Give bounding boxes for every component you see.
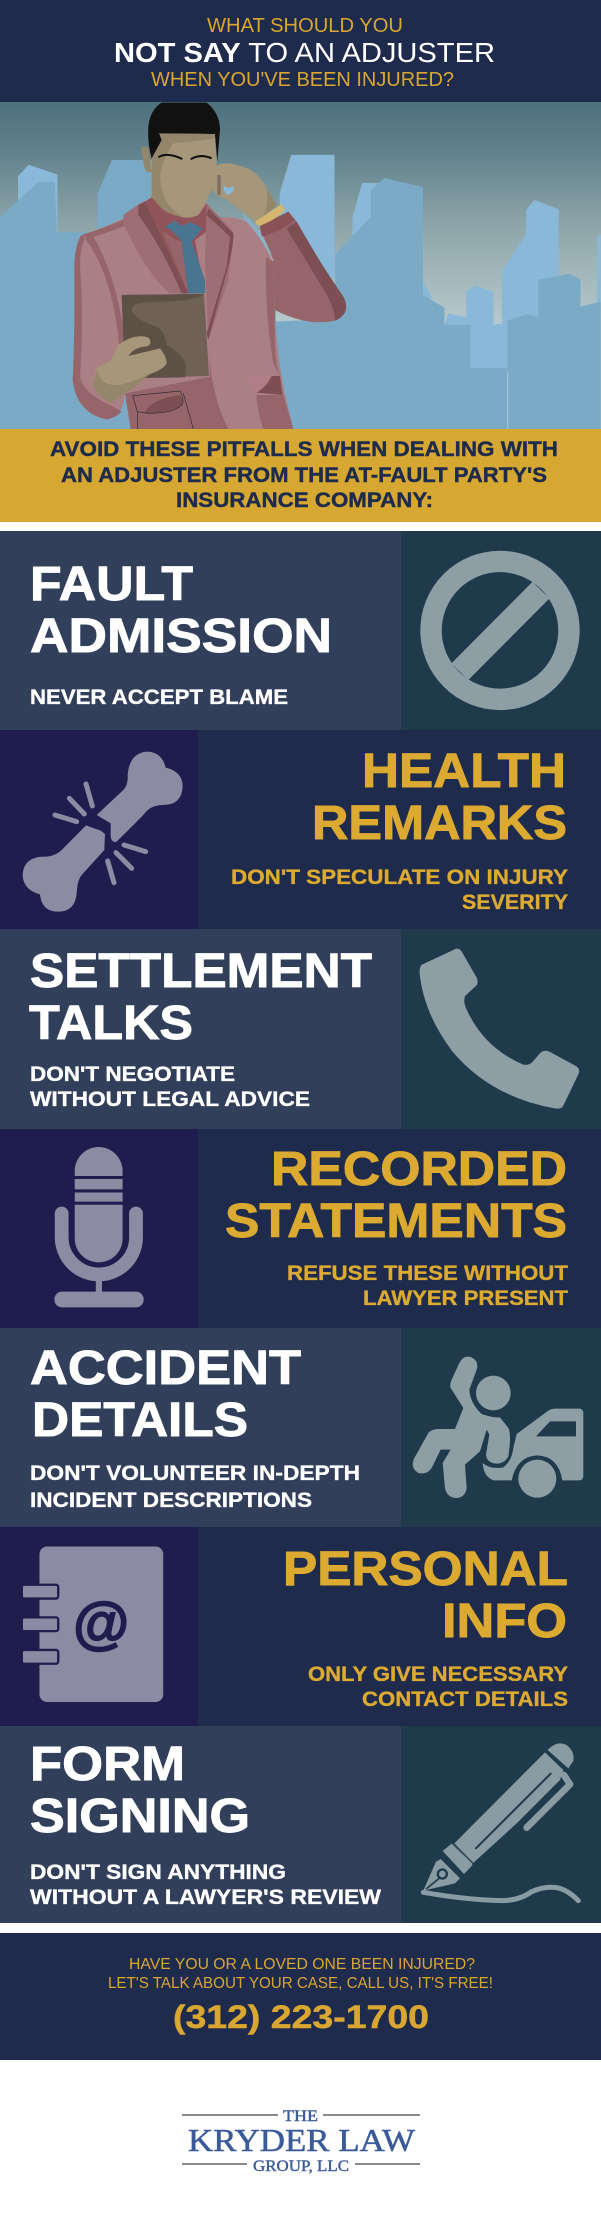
heading: RECORDED xyxy=(271,1143,567,1196)
panel: health remarks xyxy=(0,730,601,929)
face shadow xyxy=(152,133,215,217)
panel: accident details xyxy=(0,1328,601,1527)
call to action text: HAVE YOU OR A LOVED ONE BEEN INJURED? xyxy=(129,1956,475,1973)
hair xyxy=(148,103,220,162)
gold subheading band xyxy=(0,429,601,522)
panel: personal info xyxy=(0,1527,601,1726)
subheading text: AVOID THESE PITFALLS WHEN DEALING WITH xyxy=(50,438,558,461)
icon: microphone xyxy=(54,1147,144,1307)
hand holding clipboard xyxy=(93,336,167,403)
panel: form signing xyxy=(0,1726,601,1923)
heading: FAULT xyxy=(30,558,193,611)
title line 1: WHAT SHOULD YOU xyxy=(207,15,403,37)
ear xyxy=(141,147,152,172)
logo: The Kryder Law Group, LLC: THE xyxy=(283,2108,318,2125)
call to action footer: LET'S TALK ABOUT YOUR CASE, CALL US, IT'S FREE! xyxy=(108,1975,493,1992)
title line 3: WHEN YOU'VE BEEN INJURED? xyxy=(151,69,454,91)
panel: recorded statements xyxy=(0,1129,601,1328)
panel: form signing: SIGNING xyxy=(30,1790,250,1843)
hero illustration: man on phone before city skyline xyxy=(0,102,601,430)
city skyline xyxy=(0,155,601,430)
panel: recorded statements: STATEMENTS xyxy=(225,1195,567,1248)
icon: address book: @ xyxy=(73,1591,129,1655)
panel: form signing: WITHOUT A LAWYER'S REVIEW xyxy=(30,1886,381,1909)
panel: accident details: INCIDENT DESCRIPTIONS xyxy=(30,1489,312,1512)
man figure xyxy=(73,103,346,429)
heading: ACCIDENT xyxy=(30,1342,301,1395)
heading: PERSONAL xyxy=(283,1543,568,1596)
description: DON'T SPECULATE ON INJURY xyxy=(231,866,568,889)
tie xyxy=(165,221,205,293)
title line 2: NOT SAY TO AN ADJUSTER xyxy=(114,37,495,68)
panel: health remarks: SEVERITY xyxy=(462,891,568,914)
icon: fountain pen signing xyxy=(423,1743,578,1901)
description: REFUSE THESE WITHOUT xyxy=(287,1262,568,1285)
panel: settlement talks: TALKS xyxy=(29,997,193,1050)
panel: recorded statements: LAWYER PRESENT xyxy=(363,1287,568,1310)
description: NEVER ACCEPT BLAME xyxy=(30,686,288,709)
call to action footer xyxy=(0,1933,601,2060)
jacket xyxy=(73,197,293,429)
description: DON'T VOLUNTEER IN-DEPTH xyxy=(30,1462,360,1485)
heading: FORM xyxy=(30,1738,185,1791)
panel: fault admission: ADMISSION xyxy=(30,610,332,663)
heading: SETTLEMENT xyxy=(30,945,372,998)
eyebrows xyxy=(158,155,212,159)
face xyxy=(152,135,217,218)
logo: The Kryder Law Group, LLC: GROUP, LLC xyxy=(253,2158,349,2175)
jacket pocket xyxy=(133,391,193,429)
panel: personal info: INFO xyxy=(442,1595,567,1648)
phone number: (312) 223-1700 xyxy=(173,1999,429,2035)
clipboard xyxy=(122,294,209,378)
panel: personal info: CONTACT DETAILS xyxy=(362,1688,568,1711)
description: ONLY GIVE NECESSARY xyxy=(308,1663,568,1686)
gold subheading band: INSURANCE COMPANY: xyxy=(176,489,433,512)
description: DON'T SIGN ANYTHING xyxy=(30,1861,286,1884)
raised arm sleeve xyxy=(244,212,346,322)
icon: person hit by car xyxy=(413,1357,583,1498)
panel: settlement talks xyxy=(0,929,601,1129)
panel: fault admission xyxy=(0,531,601,730)
icon: prohibition sign xyxy=(431,561,569,699)
gold subheading band: AN ADJUSTER FROM THE AT-FAULT PARTY'S xyxy=(61,464,547,487)
panel: settlement talks: WITHOUT LEGAL ADVICE xyxy=(30,1088,310,1111)
icon: address book xyxy=(22,1546,163,1702)
hand at ear with phone xyxy=(210,163,285,226)
panel: accident details: DETAILS xyxy=(32,1394,248,1447)
logo: The Kryder Law Group, LLC xyxy=(182,2108,420,2175)
icon: broken bone xyxy=(23,752,183,912)
header banner xyxy=(0,0,601,102)
panel: health remarks: REMARKS xyxy=(312,797,567,850)
heading: HEALTH xyxy=(362,745,566,798)
icon: telephone handset xyxy=(420,949,579,1109)
description: DON'T NEGOTIATE xyxy=(30,1063,235,1086)
logo: The Kryder Law Group, LLC: KRYDER LAW xyxy=(188,2122,416,2158)
